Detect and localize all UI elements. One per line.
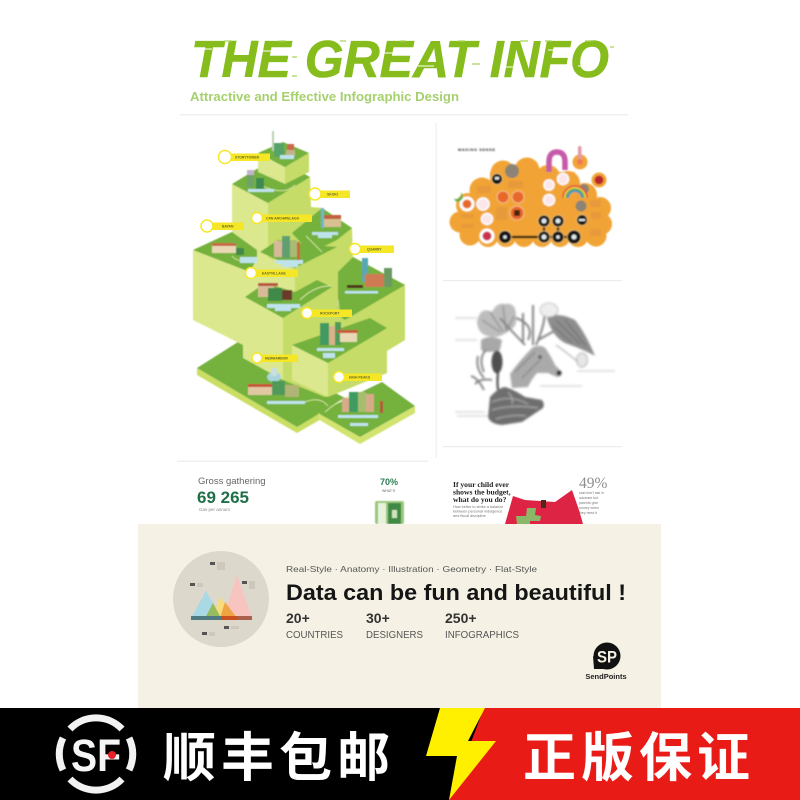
stat: infographics: INFOGRAPHICS bbox=[445, 630, 519, 641]
chart markers bbox=[190, 562, 247, 635]
map labels bbox=[201, 150, 394, 382]
label: high peaks: HIGH PEAKS bbox=[349, 376, 371, 380]
top block bbox=[258, 142, 309, 184]
body copy: How better to strike a balance bbox=[453, 505, 503, 509]
orange triangle bbox=[220, 602, 237, 618]
light step faces bbox=[245, 252, 295, 300]
chart notes bbox=[197, 562, 255, 636]
building cluster: summit bbox=[272, 131, 295, 159]
panel: isometric city map bbox=[193, 131, 415, 444]
label: newharbor bbox=[252, 353, 298, 363]
cloud heading: MAKING SENSE bbox=[458, 147, 495, 152]
stat: countries bbox=[286, 610, 343, 641]
label: can archipelago bbox=[252, 212, 312, 224]
strawberry icon bbox=[480, 228, 494, 244]
header divider bbox=[180, 114, 628, 116]
orange icons bbox=[497, 191, 524, 220]
blue triangle bbox=[191, 591, 222, 618]
panel: anatomy sketch with deer and eagle bbox=[455, 303, 615, 425]
magnet bbox=[549, 152, 565, 172]
label: rockport: ROCKPORT bbox=[320, 312, 340, 316]
percent note: advance but bbox=[579, 496, 598, 500]
shipping slogan: 顺丰包邮 bbox=[163, 716, 395, 792]
stat: infographics: 250+ bbox=[445, 610, 477, 626]
divider bbox=[443, 446, 622, 447]
building cluster: quarry bbox=[345, 258, 392, 294]
building cluster: high peaks bbox=[338, 392, 383, 426]
lower right slab bbox=[318, 382, 415, 444]
percent note: said don't ask in bbox=[579, 491, 604, 495]
cat shape bbox=[505, 490, 583, 524]
building cluster: newharbor bbox=[248, 368, 305, 404]
green triangle bbox=[205, 603, 221, 618]
percent note bbox=[579, 491, 604, 515]
label: quarry: QUARRY bbox=[367, 248, 382, 252]
SendPoints logo bbox=[585, 642, 627, 681]
icon: SF logo bbox=[59, 718, 133, 790]
annotation lines bbox=[455, 318, 615, 416]
bottom red band bbox=[449, 708, 800, 800]
grey icons bbox=[505, 164, 589, 212]
label: quarry bbox=[350, 244, 394, 254]
rainbow bbox=[563, 186, 587, 198]
stat: designers bbox=[366, 610, 423, 641]
antlers bbox=[500, 305, 556, 345]
banner bbox=[138, 524, 661, 708]
coiled snake bbox=[488, 387, 544, 425]
middle block bbox=[292, 318, 387, 397]
headline: Data can be fun and beautiful ! bbox=[286, 580, 626, 605]
body copy bbox=[453, 505, 503, 518]
body copy: and fiscal discipline bbox=[453, 514, 486, 518]
percent note: parents give bbox=[579, 501, 598, 505]
connector line bbox=[505, 221, 574, 237]
heading: If your child ever bbox=[453, 480, 510, 489]
red badge bbox=[592, 172, 606, 188]
green cross bbox=[516, 508, 541, 524]
icon: lightning bolt bbox=[426, 708, 496, 800]
label: high peaks bbox=[334, 372, 382, 382]
label: bayan: BAYAN bbox=[222, 224, 234, 228]
plant bbox=[471, 350, 492, 390]
percent value: 70% bbox=[380, 477, 398, 487]
stat: countries: COUNTRIES bbox=[286, 630, 343, 641]
panel: gross gathering statistic bbox=[197, 476, 404, 524]
label: storytower bbox=[218, 150, 270, 164]
divider under map bbox=[177, 460, 428, 462]
label: skoki: SKOKI bbox=[327, 192, 338, 196]
body copy: between personal indulgence bbox=[453, 510, 502, 514]
label: eastvillage bbox=[246, 268, 298, 278]
authenticity slogan: 正版保证 bbox=[523, 716, 755, 792]
stat unit: Gas per annum bbox=[199, 507, 230, 512]
label: eastvillage: EASTVILLAGE bbox=[262, 272, 286, 276]
stat: designers: DESIGNERS bbox=[366, 630, 423, 641]
stat: designers: 30+ bbox=[366, 610, 390, 626]
building cluster: rockport bbox=[317, 322, 358, 358]
paths bbox=[232, 185, 362, 412]
percent note: they need it bbox=[579, 511, 597, 515]
label: storytower: STORYTOWER bbox=[235, 156, 260, 160]
label: bayan bbox=[201, 220, 244, 232]
stat value: 69 265 bbox=[197, 488, 249, 507]
dark speaker bbox=[514, 210, 520, 216]
eagle bbox=[540, 303, 595, 367]
label: newharbor: NEWHARBOR bbox=[265, 356, 288, 360]
title: THE GREAT INFO bbox=[191, 31, 609, 89]
SendPoints logo: SendPoints bbox=[585, 672, 627, 681]
terraces bbox=[193, 208, 405, 320]
icon details bbox=[495, 177, 585, 240]
percent caption: WHAT'S bbox=[382, 489, 396, 493]
brown tag bbox=[541, 500, 546, 508]
pink triangle bbox=[223, 575, 252, 618]
bottom black band bbox=[0, 708, 800, 800]
icon: SF logo: SF bbox=[71, 730, 121, 781]
building cluster: eastvillage bbox=[258, 283, 300, 311]
thermometer badge bbox=[572, 146, 588, 170]
stat: countries: 20+ bbox=[286, 610, 310, 626]
stat: infographics bbox=[445, 610, 519, 641]
percent note: money when bbox=[579, 506, 599, 510]
main block silhouette bbox=[232, 177, 405, 397]
building cluster: bayan bbox=[212, 243, 257, 263]
panel: red cat budget graphic bbox=[453, 475, 608, 524]
building cluster: second tier bbox=[247, 170, 274, 192]
green leaf bbox=[454, 192, 463, 202]
cloud shape bbox=[450, 158, 612, 247]
dark bird bbox=[492, 350, 502, 390]
building cluster: archipelago bbox=[274, 236, 303, 267]
black icons bbox=[492, 174, 588, 244]
label: can archipelago: CAN ARCHIPELAGO bbox=[266, 216, 300, 220]
upper block two bbox=[232, 158, 311, 262]
divider bbox=[443, 280, 622, 281]
percent: 49% bbox=[579, 475, 608, 492]
deer head bbox=[510, 346, 562, 388]
genre line: Real-Style · Anatomy · Illustration · Geometry · Flat-Style bbox=[286, 564, 537, 574]
heading: shows the budget, bbox=[453, 488, 511, 496]
label: rockport bbox=[302, 308, 352, 318]
orange ring bbox=[460, 196, 474, 212]
subtitle: Attractive and Effective Infographic Design bbox=[190, 90, 459, 104]
stat label: Gross gathering bbox=[198, 476, 266, 487]
label: skoki bbox=[309, 188, 350, 200]
panel: making sense orange cloud bbox=[450, 146, 612, 247]
flower bbox=[477, 304, 516, 352]
SendPoints logo: SP bbox=[597, 648, 617, 666]
main block left face bbox=[193, 232, 283, 380]
jar icon bbox=[375, 501, 404, 524]
lower left slab bbox=[197, 342, 345, 433]
mountain chart badge bbox=[173, 551, 269, 647]
heading: what do you do? bbox=[453, 495, 507, 504]
annotation tints bbox=[461, 181, 601, 236]
heading bbox=[453, 480, 511, 504]
pink circles bbox=[477, 174, 568, 224]
building cluster: skoki bbox=[312, 208, 341, 238]
baseline bar bbox=[191, 616, 252, 620]
yellow triangle bbox=[212, 597, 236, 618]
